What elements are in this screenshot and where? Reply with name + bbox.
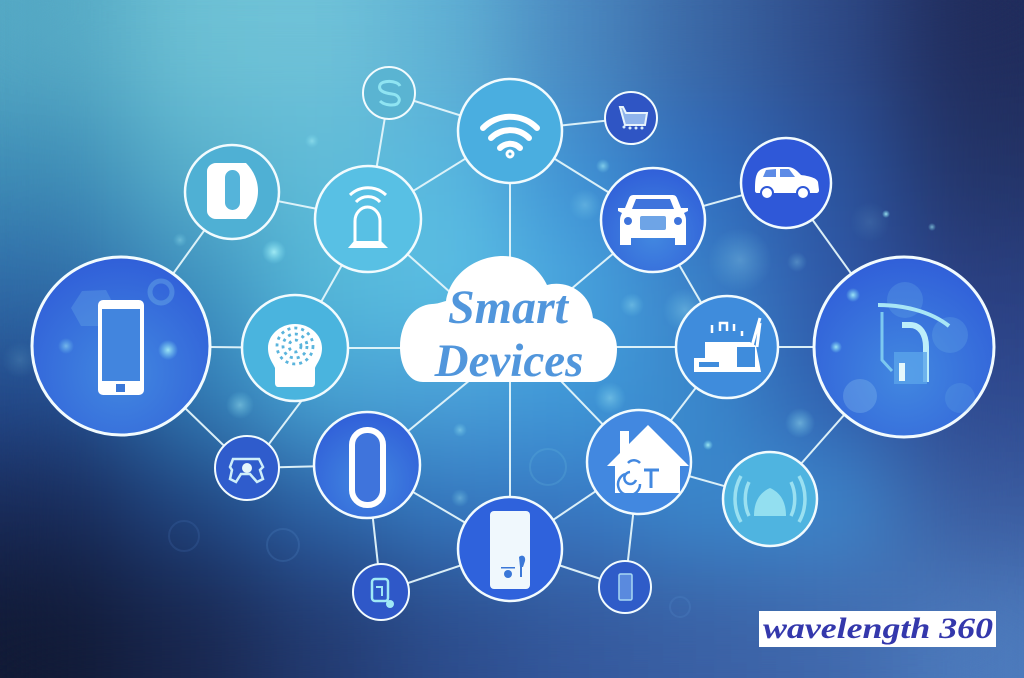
node: big phone (32, 257, 210, 435)
node: side car (741, 138, 831, 228)
node: big lock (814, 257, 994, 437)
node: brain bulb (242, 295, 348, 401)
node: home (587, 410, 691, 514)
node: sound (723, 452, 817, 546)
title: Smart Devices: Devices (434, 335, 583, 387)
node: small top icon (363, 67, 415, 119)
node: music small (215, 436, 279, 500)
node: cart (605, 92, 657, 144)
node: wristband top left (185, 145, 279, 239)
node: wristband bottom (314, 412, 420, 518)
logo label: wavelength 360: wavelength 360 (763, 612, 993, 645)
background glowing particles (2, 134, 936, 617)
node: front car (601, 168, 705, 272)
node: factory (676, 296, 778, 398)
cloud with title (400, 256, 617, 387)
node: wifi (458, 79, 562, 183)
node: small bottom left (353, 564, 409, 620)
node: phone bottom (458, 497, 562, 601)
title: Smart Devices: Smart (448, 281, 570, 334)
icon: wifi signal (483, 117, 537, 156)
node: bell sensor (315, 166, 421, 272)
node: small bottom right (599, 561, 651, 613)
connector lines (121, 93, 904, 592)
